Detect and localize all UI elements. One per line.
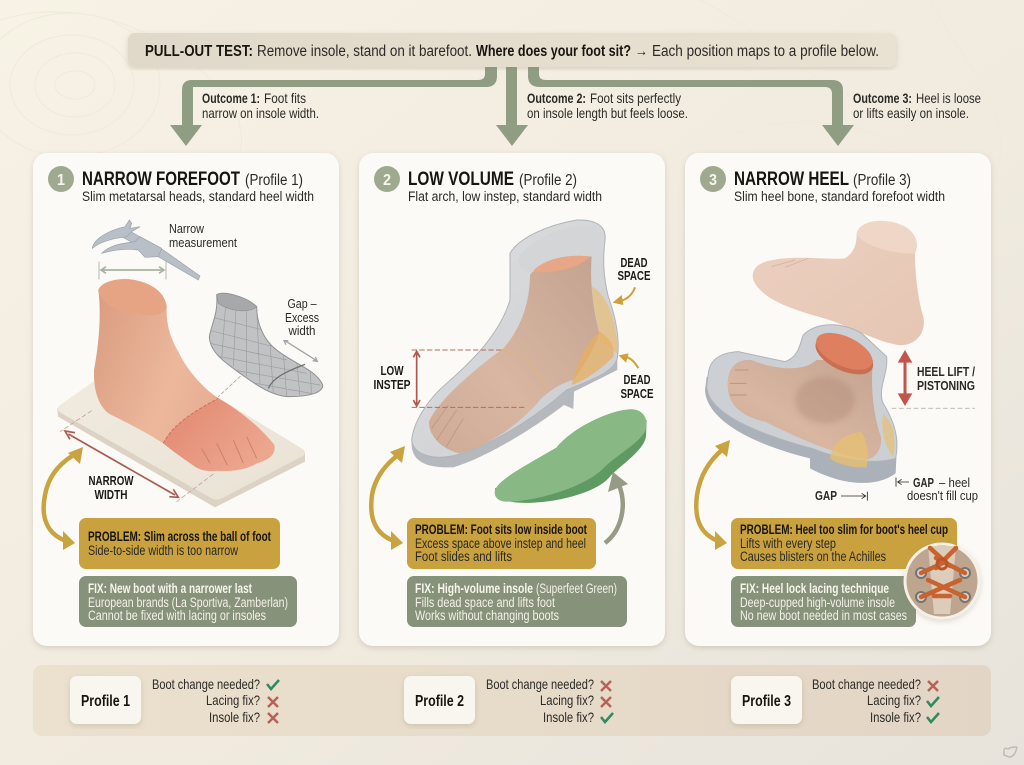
boot shell	[412, 220, 618, 457]
pull-out test banner	[128, 33, 896, 67]
pull-out test banner: Where does your foot sit?	[476, 43, 631, 60]
outcome 2 label: on insole length but feels loose.	[527, 105, 688, 121]
labels: narrow heel illustration: – heel	[939, 475, 970, 490]
labels: low volume illustration: INSTEP	[374, 377, 411, 392]
heading: narrow forefoot	[82, 169, 314, 204]
fix box 1: FIX: New boot with a narrower last	[88, 581, 252, 596]
arrow: illustration to problem	[371, 446, 405, 550]
summary: profile 2: Lacing fix?	[540, 692, 594, 708]
outcome 3 label: Outcome 3:	[853, 90, 912, 106]
fix box 2: (Superfeet Green)	[536, 581, 617, 596]
summary: profile 2: Boot change needed?	[486, 676, 594, 692]
problem box 1	[79, 518, 280, 569]
dead space arrows	[617, 287, 635, 302]
summary: profile 2: Profile 2	[415, 693, 464, 710]
heading: narrow heel	[734, 169, 945, 204]
fix box 3: Deep-cupped high-volume insole	[740, 595, 895, 610]
heading: narrow forefoot: NARROW FOREFOOT	[82, 169, 240, 190]
summary: profile 1: Boot change needed?	[152, 676, 260, 692]
boot sole	[412, 353, 617, 467]
heading: narrow heel: Slim heel bone, standard forefoot width	[734, 189, 945, 204]
labels: narrow forefoot illustration: Gap –	[288, 296, 317, 311]
number badge 1	[48, 166, 74, 192]
fix box 2: FIX: High-volume insole	[415, 581, 533, 596]
outcome 3 label: or lifts easily on insole.	[853, 105, 969, 121]
dead space	[592, 287, 617, 353]
summary: profile 3	[731, 676, 939, 725]
number badge 2: 2	[383, 172, 391, 189]
fix box 1: Cannot be fixed with lacing or insoles	[88, 608, 266, 623]
problem box 3: Lifts with every step	[740, 536, 836, 551]
arrow: outcome 1	[170, 67, 497, 146]
pull-out test banner: Remove insole, stand on it barefoot.	[257, 43, 472, 60]
icon: caliper	[92, 220, 200, 280]
summary: profile 1: Profile 1	[81, 693, 130, 710]
fix box 3	[731, 576, 916, 627]
heading: low volume: LOW VOLUME	[408, 169, 514, 190]
labels: narrow heel illustration: GAP	[913, 475, 934, 490]
plate	[57, 382, 305, 507]
fix box 2: Works without changing boots	[415, 608, 559, 623]
pull-out test banner: Each position maps to a profile below.	[652, 43, 879, 60]
problem box 1: PROBLEM: Slim across the ball of foot	[88, 529, 271, 544]
heading: narrow forefoot: Slim metatarsal heads, standard heel width	[82, 189, 314, 204]
fix box 1	[79, 576, 297, 627]
labels: low volume illustration	[374, 255, 654, 401]
problem box 2: Excess space above instep and heel	[415, 536, 586, 551]
arrow: illustration to problem	[696, 440, 730, 550]
panel: narrow heel	[685, 153, 991, 646]
labels: low volume illustration: SPACE	[618, 268, 651, 283]
summary: profile 3: Insole fix?	[870, 709, 921, 725]
problem box 3	[731, 518, 957, 569]
summary: profile 2	[404, 676, 613, 725]
labels: narrow forefoot illustration: NARROW	[88, 473, 134, 488]
heading: narrow heel: NARROW HEEL	[734, 169, 849, 190]
fix box 2	[407, 576, 627, 627]
fix box 3: FIX: Heel lock lacing technique	[740, 581, 889, 596]
problem box 2: Foot slides and lifts	[415, 549, 512, 564]
labels: narrow forefoot illustration: WIDTH	[94, 487, 128, 502]
heel lift arrow	[900, 357, 909, 400]
outcome 1 label: Outcome 1:	[202, 90, 260, 106]
heading: low volume: Flat arch, low instep, standard width	[408, 189, 602, 204]
labels: narrow forefoot illustration: Excess	[285, 310, 319, 325]
labels: narrow forefoot illustration: width	[288, 323, 316, 338]
heading: low volume	[408, 169, 602, 204]
summary: profile 1: Insole fix?	[209, 709, 260, 725]
outcome 1 label: narrow on insole width.	[202, 105, 319, 121]
narrow width arrow	[65, 431, 178, 497]
heading: low volume: (Profile 2)	[519, 172, 577, 189]
labels: low volume illustration: DEAD	[624, 372, 650, 387]
summary: profile 1: Lacing fix?	[206, 692, 260, 708]
pull-out test banner: PULL-OUT TEST:	[145, 43, 253, 60]
outcome 2 label: Foot sits perfectly	[590, 90, 681, 106]
outcome 1 label: Foot fits	[264, 90, 306, 106]
heel gap patches	[830, 432, 868, 468]
panel: narrow forefoot	[33, 153, 339, 646]
arrow: insole to problem	[605, 472, 628, 543]
raised foot	[753, 221, 924, 345]
summary: profile 1	[70, 676, 279, 725]
problem box 3: Causes blisters on the Achilles	[740, 549, 886, 564]
labels: narrow forefoot illustration: Narrow	[169, 221, 205, 236]
boot shell	[707, 325, 897, 461]
corner mark	[1004, 747, 1017, 757]
boot sole	[705, 377, 897, 483]
problem box 1: Side-to-side width is too narrow	[88, 543, 238, 558]
arrow: illustration to problem	[44, 447, 83, 550]
labels: narrow forefoot illustration	[88, 221, 319, 502]
icon: mesh last	[208, 290, 323, 397]
number badge 3: 3	[709, 172, 717, 189]
summary: profile 3: Lacing fix?	[867, 692, 921, 708]
outcome 3 label	[853, 90, 981, 121]
pull-out test banner: →	[635, 43, 648, 60]
outcome 2 label	[527, 90, 688, 121]
number badge 3	[700, 166, 726, 192]
summary: profile 2: Insole fix?	[543, 709, 594, 725]
illustration: foot on narrow plate	[57, 220, 323, 507]
icon: heel lock lacing	[905, 544, 979, 618]
fix box 2: Fills dead space and lifts foot	[415, 595, 555, 610]
fix box 1: European brands (La Sportiva, Zamberlan)	[88, 595, 288, 610]
number badge 2	[374, 166, 400, 192]
illustration: heel lifting in boot	[705, 221, 975, 501]
labels: low volume illustration: LOW	[380, 363, 404, 378]
foot	[429, 256, 599, 453]
panel: low volume	[359, 153, 665, 646]
outcome 2 label: Outcome 2:	[527, 90, 586, 106]
labels: narrow heel illustration: GAP	[815, 488, 837, 503]
heading: narrow forefoot: (Profile 1)	[245, 172, 303, 189]
summary: profile 3: Profile 3	[742, 693, 791, 710]
outcome 1 label	[202, 90, 319, 121]
labels: narrow forefoot illustration: measurement	[169, 235, 237, 250]
heading: narrow heel: (Profile 3)	[853, 172, 911, 189]
labels: narrow heel illustration: PISTONING	[917, 378, 975, 393]
summary strip	[33, 665, 991, 736]
labels: low volume illustration: DEAD	[620, 255, 648, 270]
illustration: foot in boot with insole	[412, 220, 647, 503]
low instep marker	[412, 350, 527, 407]
summary: profile 3: Boot change needed?	[812, 676, 921, 692]
labels: narrow heel illustration: doesn't fill cup	[907, 488, 978, 503]
labels: low volume illustration: SPACE	[620, 386, 654, 401]
number badge 1: 1	[57, 172, 65, 189]
labels: narrow heel illustration: HEEL LIFT /	[917, 364, 975, 379]
problem box 2	[407, 518, 596, 569]
outcome 3 label: Heel is loose	[916, 90, 981, 106]
labels: narrow heel illustration	[815, 364, 978, 503]
foot in boot	[728, 360, 881, 459]
foot	[94, 279, 275, 471]
insole	[495, 420, 647, 503]
arrow: outcome 2	[496, 67, 528, 146]
problem box 3: PROBLEM: Heel too slim for boot's heel cup	[740, 522, 948, 537]
fix box 3: No new boot needed in most cases	[740, 608, 907, 623]
problem box 2: PROBLEM: Foot sits low inside boot	[415, 522, 587, 537]
arrow: outcome 3	[528, 67, 854, 146]
gap markers	[841, 478, 909, 501]
